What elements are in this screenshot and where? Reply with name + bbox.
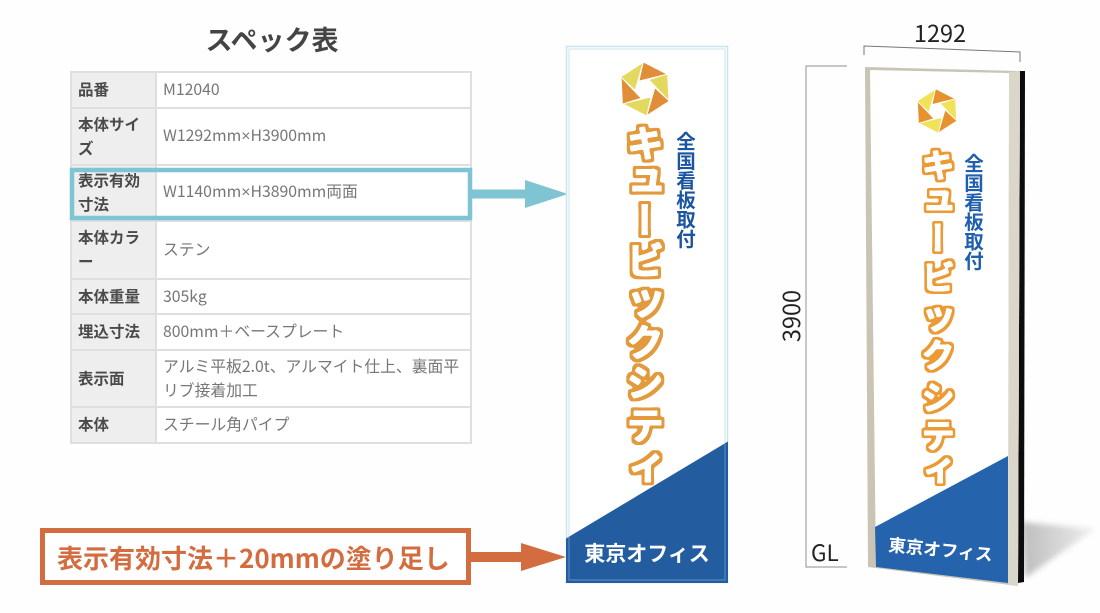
blue corner band bbox=[566, 442, 728, 583]
spec table: 品番 bbox=[78, 78, 109, 100]
left post and top rim bbox=[865, 67, 1020, 586]
white face bbox=[870, 70, 1009, 583]
tagline vertical: 全国看板取付 bbox=[672, 132, 700, 249]
spec table: W1140mm×H3890mm両面 bbox=[163, 179, 358, 202]
brand name vertical: ー bbox=[914, 221, 962, 255]
black side bbox=[1018, 71, 1025, 583]
spec table: リブ接着加工 bbox=[163, 378, 258, 400]
brand name vertical: シ bbox=[914, 380, 962, 414]
spec table: M12040 bbox=[163, 77, 220, 100]
blue band inner line bbox=[569, 444, 725, 580]
arrow: orange to bleed area bbox=[471, 543, 566, 571]
brand name vertical: シ bbox=[618, 363, 672, 401]
spec table: 埋込寸法 bbox=[78, 320, 140, 342]
brand name vertical: ッ bbox=[908, 300, 962, 338]
dimension label: width: 1292 bbox=[914, 15, 966, 49]
tagline vertical: 全国看板取付 bbox=[960, 154, 988, 271]
arrow: teal to sign artwork bbox=[472, 180, 568, 208]
sign product: perspective view bbox=[865, 67, 1095, 586]
brand name vertical: テ bbox=[618, 406, 672, 444]
brand name vertical: テ bbox=[914, 418, 962, 452]
office name: 東京オフィス bbox=[584, 538, 710, 568]
brand name vertical bbox=[908, 148, 962, 490]
title: スペック表 bbox=[205, 19, 339, 58]
highlight box: display size row bbox=[72, 170, 470, 218]
spec table: 寸法 bbox=[78, 193, 109, 215]
brand name vertical: ビ bbox=[914, 260, 962, 294]
dimension: height bracket bbox=[806, 66, 847, 567]
spec table: 本体サイ bbox=[78, 112, 140, 134]
spec table: 本体重量 bbox=[78, 284, 140, 306]
spec table: 本体 bbox=[78, 413, 109, 435]
spec table: 本体カラ bbox=[78, 226, 140, 248]
brand name vertical: ク bbox=[618, 323, 672, 361]
right post bbox=[1008, 71, 1020, 586]
spec table: 表示有効 bbox=[78, 169, 140, 191]
spec table: スチール角パイプ bbox=[163, 412, 289, 435]
sign artwork: flat layout bbox=[566, 46, 728, 583]
logo bbox=[611, 56, 679, 122]
spec table bbox=[70, 71, 472, 444]
ground shadow bbox=[1022, 522, 1095, 578]
spec table: 表示面 bbox=[78, 366, 125, 388]
spec table: 800mm＋ベースプレート bbox=[163, 319, 344, 342]
callout: bleed note: 表示有効寸法＋20mmの塗り足し bbox=[57, 539, 450, 576]
logo bbox=[909, 84, 965, 138]
brand name vertical: キ bbox=[914, 148, 962, 182]
brand name vertical: ィ bbox=[612, 447, 672, 489]
spec table: アルミ平板2.0t、アルマイト仕上、裏面平 bbox=[163, 354, 459, 376]
spec table: ステン bbox=[163, 237, 210, 260]
brand name vertical: ク bbox=[914, 338, 962, 372]
brand name vertical: ッ bbox=[612, 282, 672, 324]
brand name vertical bbox=[612, 124, 672, 489]
spec table: ー bbox=[78, 250, 94, 272]
brand name vertical: ュ bbox=[908, 182, 962, 220]
blue corner band bbox=[875, 456, 1008, 583]
brand name vertical: キ bbox=[618, 124, 672, 162]
spec table: 305kg bbox=[163, 284, 207, 306]
dimension: width bracket bbox=[864, 46, 1020, 62]
brand name vertical: ュ bbox=[612, 160, 672, 202]
spec table: W1292mm×H3900mm bbox=[163, 122, 326, 146]
brand name vertical: ビ bbox=[618, 241, 672, 279]
dimension label: height: 3900 bbox=[773, 290, 807, 342]
brand name vertical: ィ bbox=[908, 452, 962, 490]
office name: 東京オフィス bbox=[887, 532, 994, 567]
spec table: ズ bbox=[78, 136, 94, 158]
ground level label: GL bbox=[811, 536, 839, 568]
callout: bleed note bbox=[42, 530, 468, 582]
display area outline bbox=[569, 49, 725, 580]
brand name vertical: ー bbox=[618, 201, 672, 239]
bleed outline bbox=[566, 46, 728, 582]
